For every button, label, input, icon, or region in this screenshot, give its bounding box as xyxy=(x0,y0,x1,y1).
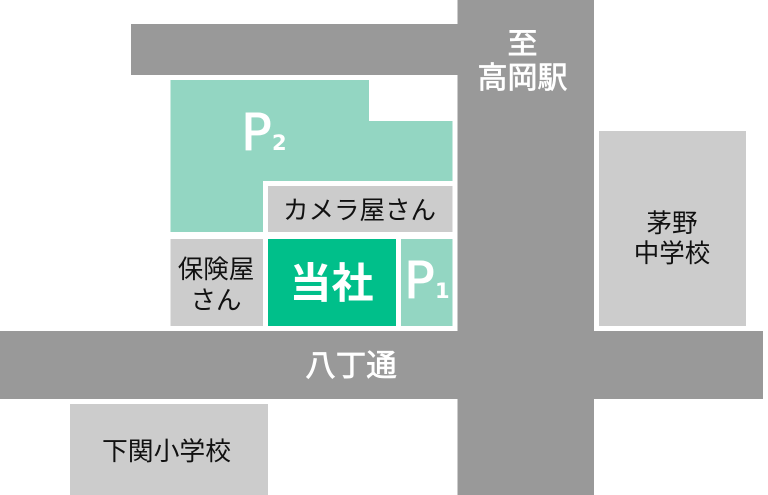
parking P1 xyxy=(401,239,452,326)
road: vertical main road xyxy=(458,0,594,495)
building: insurance shop: さん xyxy=(190,287,242,315)
building: camera shop xyxy=(268,186,452,232)
building: insurance shop xyxy=(170,239,263,326)
building: Shimonoseki elementary school xyxy=(70,404,268,495)
building: our company xyxy=(268,239,396,326)
road: upper side street xyxy=(131,24,461,75)
label: to Takaoka station: 高岡駅 xyxy=(478,62,568,95)
building: camera shop: カメラ屋さん xyxy=(283,197,436,225)
building: Chino junior high school: 茅野 xyxy=(646,210,698,238)
road: Hatchodori xyxy=(0,331,763,399)
parking P2: P xyxy=(241,104,272,163)
building: our company: 当社 xyxy=(289,260,374,307)
building: Chino junior high school: 中学校 xyxy=(634,240,710,268)
parking P1: 1 xyxy=(435,279,450,303)
parking P1: P xyxy=(404,252,435,311)
label: Hatchodori: 八丁通 xyxy=(305,349,397,383)
building: insurance shop: 保険屋 xyxy=(178,256,254,284)
building: Chino junior high school xyxy=(599,131,746,326)
label: to Takaoka station: 至 xyxy=(508,28,538,61)
parking P2 xyxy=(170,80,452,232)
parking P2: 2 xyxy=(272,131,287,155)
building: Shimonoseki elementary school: 下関小学校 xyxy=(102,437,231,466)
label: to Takaoka station xyxy=(478,28,568,95)
